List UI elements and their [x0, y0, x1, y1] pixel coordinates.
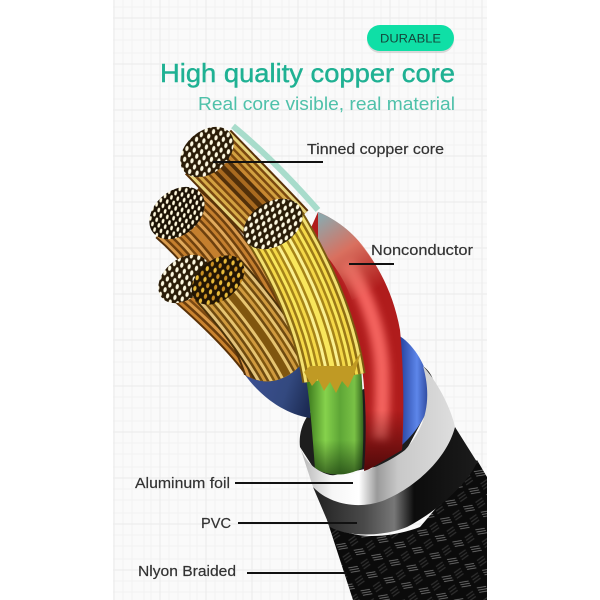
- core face: middle left: [139, 176, 215, 250]
- infographic: copper core cable: [113, 0, 487, 600]
- strand ends over green: [304, 352, 361, 393]
- copper strand bundle: top: [208, 152, 285, 232]
- PVC layer: [313, 427, 477, 535]
- label: Nonconductor: [349, 242, 473, 265]
- bundle: middle left: [177, 213, 282, 385]
- badge: DURABLE: DURABLE: [380, 32, 441, 46]
- title: High quality copper core: [160, 58, 455, 88]
- core face: front centre: [182, 245, 254, 315]
- wire: dark blue insulation: [245, 352, 312, 418]
- label: Nlyon Braided: Nlyon Braided: [138, 563, 236, 580]
- core face: yellow bundle: [234, 188, 312, 260]
- background panel with grid: [113, 0, 487, 600]
- braided sleeve: [327, 460, 487, 600]
- copper strand bundles: [177, 213, 292, 385]
- label: PVC: PVC: [201, 515, 231, 532]
- aluminum foil ring: [300, 366, 455, 505]
- label: Nonconductor: Nonconductor: [371, 242, 473, 259]
- teal edge highlight on top bundle: [233, 126, 318, 210]
- ring interior: [300, 366, 435, 478]
- wire: rear blue insulation: [396, 335, 431, 445]
- yellow strand bundle: [273, 224, 334, 378]
- badge: DURABLE: [367, 25, 454, 53]
- core face: lower left: [149, 245, 219, 313]
- bundle: lower left: [175, 296, 248, 377]
- bundle: front centre: [218, 280, 292, 385]
- label: Aluminum foil: Aluminum foil: [135, 475, 230, 492]
- wire: red insulation: [310, 212, 403, 472]
- wire: green insulation: [305, 355, 364, 474]
- label: Tinned copper core: Tinned copper core: [307, 141, 444, 158]
- cable illustration: [139, 117, 487, 600]
- core face: top: [171, 117, 243, 187]
- subtitle: Real core visible, real material: [198, 93, 455, 114]
